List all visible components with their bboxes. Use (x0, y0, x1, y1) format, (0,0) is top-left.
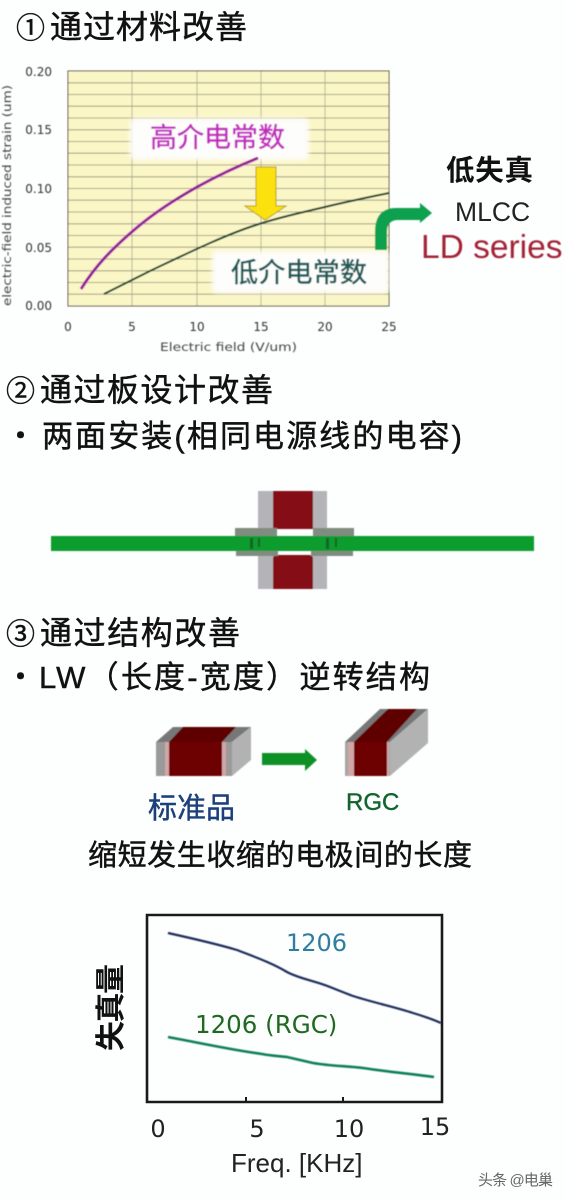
plot frame (68, 71, 389, 306)
y axis ticks: 0.00 (25, 299, 52, 313)
text: LW reverse structure bullet: LW（长度-宽度）逆转结构 (39, 660, 430, 695)
heading: 1 material improvement: 通过材料改善 (50, 9, 247, 45)
curve: high dielectric constant (81, 158, 258, 289)
x axis ticks: 20 (317, 320, 333, 334)
plot frame (147, 915, 442, 1102)
diagram: double-sided mounted capacitors on board (51, 491, 534, 589)
text: LW reverse structure bullet: ・ (5, 660, 36, 695)
chart: distortion versus frequency (95, 915, 450, 1178)
top capacitor (258, 491, 327, 529)
y axis ticks: 0.10 (25, 182, 52, 196)
label: RGC: RGC (346, 789, 399, 816)
x tick labels: 0 (150, 1115, 166, 1143)
chart: strain versus electric field (0, 65, 432, 354)
x axis ticks: 10 (189, 320, 205, 334)
x axis ticks: 5 (128, 320, 136, 334)
callout: low distortion MLCC LD series: LD series (421, 229, 562, 266)
text: double-sided mounting bullet: ・ (5, 419, 36, 454)
callout: low distortion MLCC LD series: 低失真 (446, 155, 533, 187)
x tick labels: 10 (334, 1115, 364, 1143)
label: 1206: 1206 (286, 929, 347, 957)
callout: low distortion MLCC LD series (421, 155, 562, 266)
arrow: standard to RGC (262, 749, 317, 771)
curve: 1206 RGC (168, 1037, 434, 1077)
solder pads (235, 528, 354, 556)
bottom capacitor (258, 555, 327, 589)
text: shorten electrode length: 缩短发生收缩的电极间的长度 (88, 839, 472, 872)
y axis ticks: 0.20 (25, 65, 52, 79)
label: low dielectric constant: 低介电常数 (231, 258, 367, 288)
green circuit board (51, 536, 534, 551)
x axis title: Freq. [KHz] (231, 1148, 362, 1178)
heading: 3 structure improvement: 通过结构改善 (40, 615, 240, 651)
icon: RGC chip (345, 709, 428, 776)
x tick labels (150, 1113, 450, 1143)
x axis ticks: 0 (64, 320, 72, 334)
label: 1206 RGC: 1206 (RGC) (195, 1010, 337, 1039)
heading: 2 board design improvement: 通过板设计改善 (40, 372, 273, 408)
x tick labels: 5 (249, 1115, 265, 1143)
label: high dielectric constant: 高介电常数 (150, 123, 285, 153)
heading: 3 structure improvement: ③ (6, 619, 35, 651)
y axis title: electric-field induced strain (um) (0, 85, 14, 306)
heading: 1 material improvement: ① (16, 13, 45, 45)
y axis ticks: 0.15 (25, 123, 52, 137)
label: standard product: 标准品 (148, 792, 235, 825)
icon: standard chip (156, 727, 251, 776)
x ticks marks (246, 1097, 343, 1102)
curve: 1206 (168, 933, 441, 1023)
text: double-sided mounting bullet: 两面安装(相同电源线的电容) (42, 419, 462, 454)
x axis ticks (64, 320, 397, 334)
arrow: yellow down (245, 167, 286, 220)
y axis ticks (25, 65, 52, 313)
callout: low distortion MLCC LD series: MLCC (455, 197, 530, 227)
white label backing: low dielectric (212, 251, 389, 293)
y axis ticks: 0.05 (25, 241, 52, 255)
heading: 2 board design improvement: ② (6, 376, 35, 408)
x axis ticks: 15 (253, 320, 269, 334)
y axis title: 失真量 (95, 964, 128, 1051)
x tick labels: 15 (420, 1113, 450, 1141)
x axis title: Electric field (V/um) (160, 340, 297, 354)
vias (250, 538, 337, 549)
plot background (68, 71, 389, 306)
watermark: 头条 @电巢 (478, 1172, 553, 1189)
curve: low dielectric constant (104, 193, 389, 294)
x axis ticks: 25 (381, 320, 397, 334)
arrow: green curved (375, 203, 432, 250)
white label backing: high dielectric (130, 118, 309, 160)
